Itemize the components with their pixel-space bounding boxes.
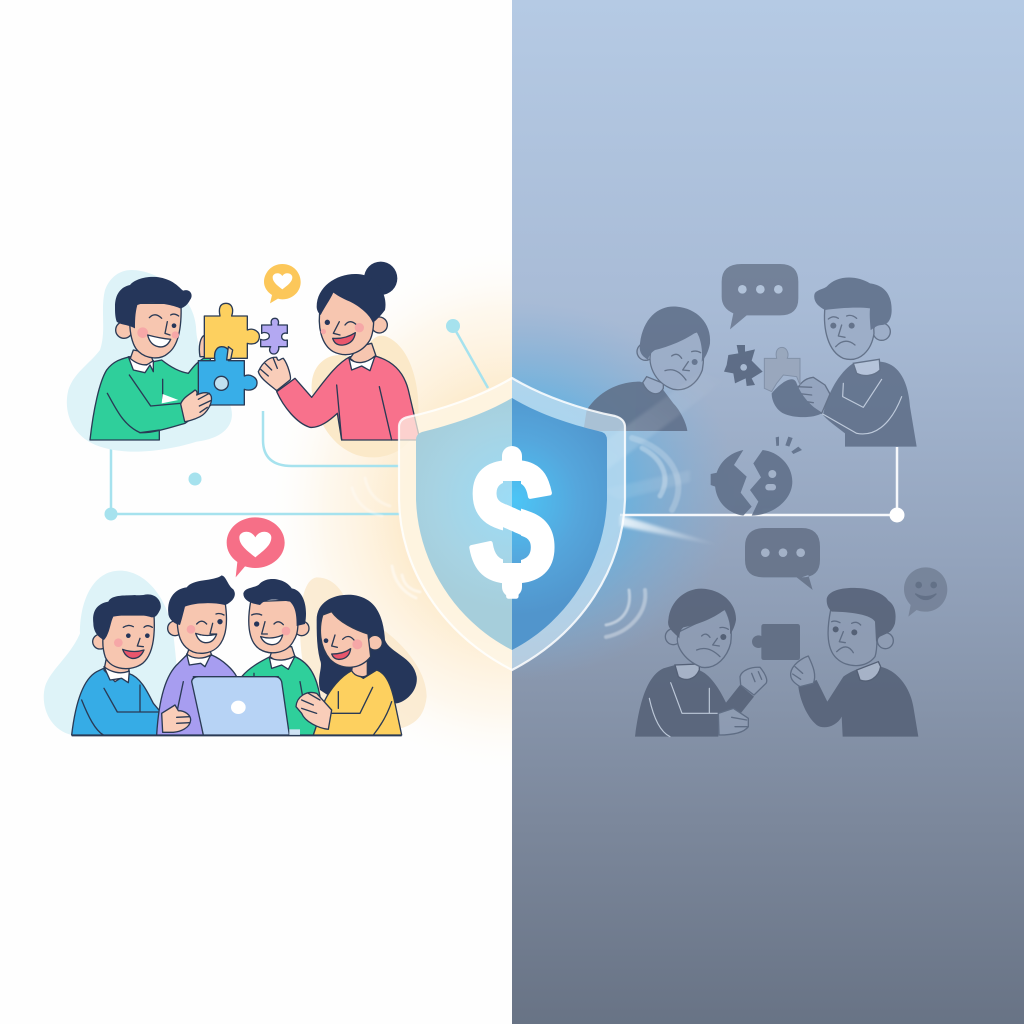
speech bubble: smiley bbox=[904, 567, 947, 617]
person: yellow sweater with long hair bbox=[313, 595, 417, 735]
puzzle piece: purple bbox=[261, 318, 287, 354]
laptop bbox=[192, 677, 300, 735]
sad person: left bbox=[583, 307, 710, 431]
woman in pink sweater bbox=[258, 262, 420, 440]
scene: four colleagues around a laptop bbox=[44, 517, 427, 736]
background blob: warm bbox=[312, 336, 419, 457]
person: blue sweater bbox=[72, 594, 162, 735]
background blob: blue bbox=[67, 270, 232, 452]
shield rim: left half bbox=[399, 378, 512, 670]
broken puzzle pieces bbox=[724, 345, 822, 417]
speech bubble: ellipsis bbox=[745, 528, 820, 590]
shield rim: right half bbox=[512, 378, 625, 670]
person: purple sweater bbox=[157, 575, 237, 735]
scene: two colleagues joining puzzle pieces bbox=[67, 262, 420, 457]
connector lines: right network bbox=[620, 447, 904, 522]
sad person: left bbox=[635, 589, 767, 737]
person: green sweater bbox=[242, 579, 325, 735]
shield outline bbox=[399, 378, 625, 670]
background: bright left half bbox=[0, 0, 512, 1024]
light rays from shield bbox=[525, 372, 726, 546]
speech bubble: yellow heart bbox=[264, 264, 301, 303]
man's hand bbox=[181, 390, 212, 422]
table line bbox=[72, 733, 402, 738]
ripple arcs: faint sound waves bbox=[352, 438, 678, 637]
connector lines: left network bbox=[104, 319, 488, 520]
sad person: right bbox=[791, 588, 918, 737]
sad person: right bbox=[797, 277, 917, 447]
clasped hands bbox=[162, 692, 332, 732]
scene: two muted colleagues with broken puzzle bbox=[583, 264, 917, 516]
shield core: left half bbox=[416, 398, 512, 650]
shield core: right half bbox=[512, 398, 607, 650]
puzzle piece: yellow bbox=[204, 303, 259, 358]
scene: two muted colleagues disagreeing bbox=[635, 528, 947, 737]
speech bubble: pink heart bbox=[227, 517, 285, 577]
speech bubble: ellipsis bbox=[722, 264, 798, 329]
background: muted right half bbox=[512, 0, 1024, 1024]
background blob: warm bbox=[300, 577, 427, 732]
man in green sweater bbox=[90, 277, 213, 440]
background blob: blue bbox=[44, 571, 177, 735]
shield with dollar sign bbox=[399, 378, 625, 670]
broken heart icon bbox=[711, 437, 802, 516]
puzzle piece: loose bbox=[752, 624, 800, 660]
finger behind puzzle bbox=[199, 335, 210, 357]
dollar sign: $ bbox=[469, 423, 555, 622]
puzzle piece: blue bbox=[198, 347, 257, 405]
